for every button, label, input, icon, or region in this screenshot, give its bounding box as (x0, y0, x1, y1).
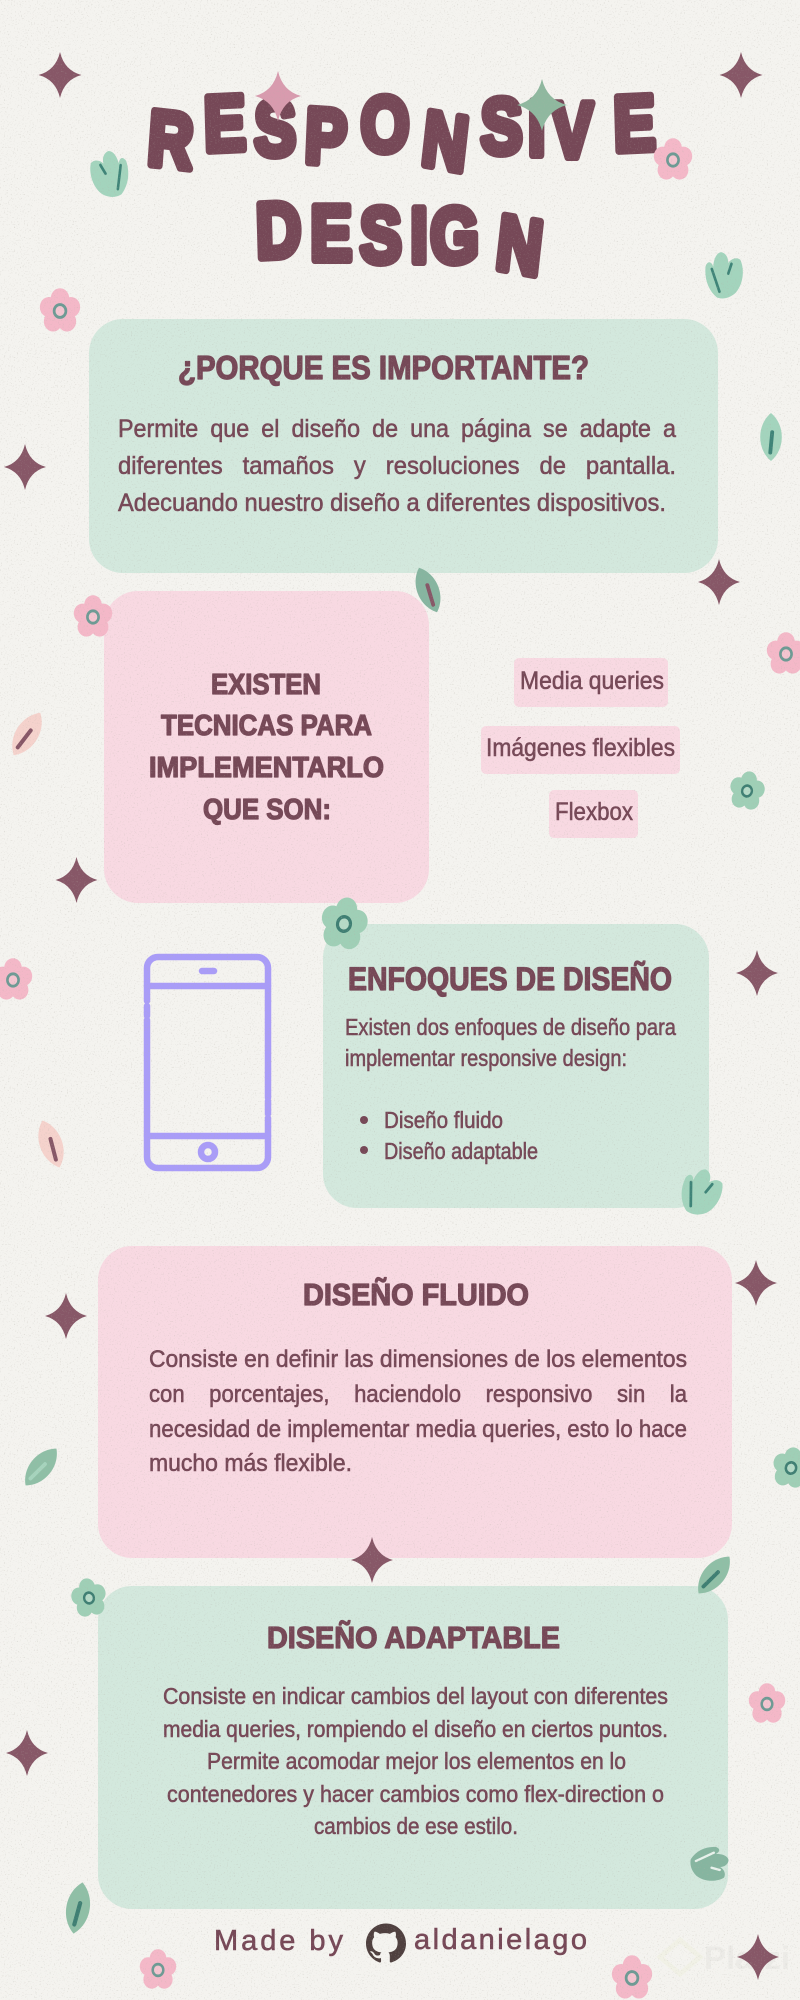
footer credit (214, 1923, 587, 1963)
heading lines: IMPLEMENTARLO (149, 752, 384, 784)
body text: Permite que el diseño de una página se adapte a (118, 415, 676, 443)
panel background (323, 924, 709, 1208)
tag: media queries: Media queries (520, 667, 664, 695)
panel: diseno adaptable (98, 1586, 728, 1909)
body text: Consiste en definir las dimensiones de los elementos (149, 1346, 687, 1373)
title line: DESIGN: DESIGN (255, 185, 547, 292)
body text (118, 415, 676, 517)
heading: DISEÑO FLUIDO (303, 1277, 529, 1312)
panel background (98, 1246, 732, 1558)
panel: diseno fluido (98, 1246, 732, 1558)
panel: porque es importante (89, 319, 718, 573)
decoration: bush leaves (88, 148, 745, 1884)
heading lines: TECNICAS PARA (161, 710, 372, 742)
panel background (89, 319, 718, 573)
bullet list: Diseño adaptable (384, 1138, 538, 1164)
tag: media queries (514, 658, 668, 707)
body text: Adecuando nuestro diseño a diferentes dispositivos. (118, 489, 666, 517)
tag: flexbox: Flexbox (555, 798, 633, 826)
panel background (98, 1586, 728, 1909)
made by text: Made by (214, 1925, 344, 1957)
bullet list (360, 1107, 538, 1164)
decoration: green flowers (69, 769, 800, 1619)
intro text (345, 1014, 676, 1071)
bullet list: Diseño fluido (384, 1107, 503, 1133)
tag: flexbox (549, 790, 638, 838)
heading lines: QUE SON: (203, 794, 331, 826)
panel: existen tecnicas (104, 591, 429, 903)
body text (163, 1683, 668, 1839)
body text: con porcentajes, haciendolo responsivo sin la (149, 1381, 688, 1408)
watermark: Platzi: Platzi (704, 1940, 790, 1976)
intro text: Existen dos enfoques de diseño para (345, 1014, 676, 1040)
panel: enfoques de diseno (323, 924, 709, 1208)
decoration: single leaves (4, 413, 782, 1936)
body text: media queries, rompiendo el diseño en ciertos puntos. (163, 1716, 668, 1742)
body text: mucho más flexible. (149, 1450, 352, 1477)
heading lines (149, 669, 384, 826)
heading: DISEÑO ADAPTABLE (267, 1620, 560, 1655)
body text: contenedores y hacer cambios como flex-direction o (167, 1781, 664, 1807)
heading: ENFOQUES DE DISEÑO (348, 961, 672, 997)
title (145, 79, 656, 292)
body text: Permite acomodar mejor los elementos en lo (207, 1748, 626, 1774)
intro text: implementar responsive design: (345, 1045, 627, 1071)
panel background (104, 591, 429, 903)
heading: ¿PORQUE ES IMPORTANTE? (178, 349, 589, 386)
body text: diferentes tamaños y resoluciones de pantalla. (118, 452, 676, 480)
icon: smartphone (147, 957, 268, 1168)
watermark: Platzi (660, 1940, 790, 1976)
tag: imagenes flexibles: Imágenes flexibles (486, 734, 675, 762)
body text (149, 1346, 688, 1477)
body text: necesidad de implementar media queries, esto lo hace (149, 1416, 687, 1443)
github handle: aldanielago (414, 1924, 587, 1956)
tag: imagenes flexibles (481, 726, 680, 774)
body text: Consiste en indicar cambios del layout con diferentes (163, 1683, 668, 1709)
body text: cambios de ese estilo. (314, 1813, 518, 1839)
title line: RESPONSIVE: RESPONSIVE (145, 79, 656, 188)
heading lines: EXISTEN (211, 669, 321, 701)
icon: github (366, 1923, 406, 1963)
